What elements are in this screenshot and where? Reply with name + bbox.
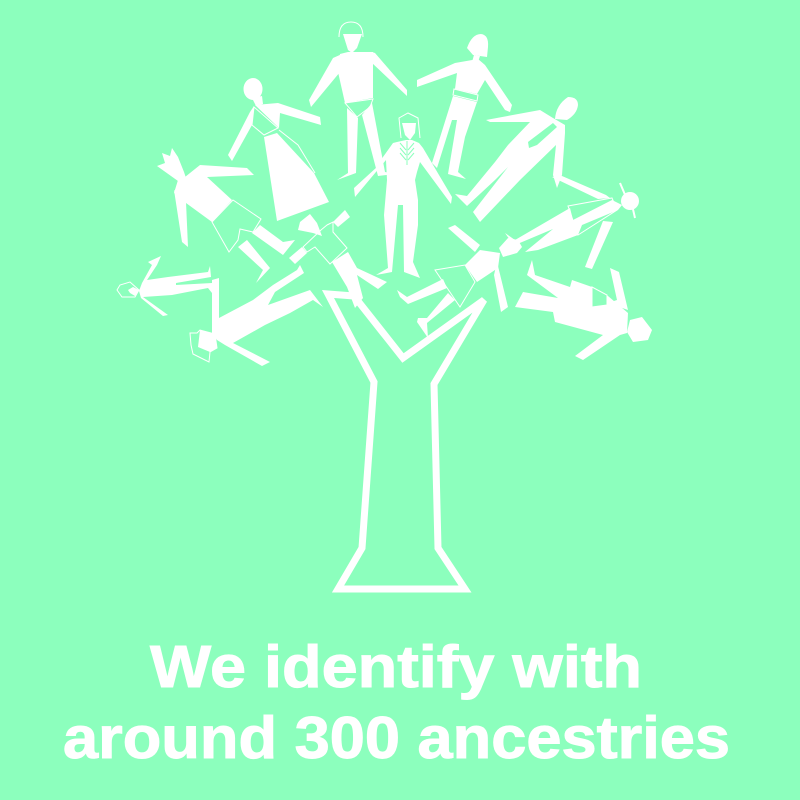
heading	[63, 634, 730, 771]
figure: man with tie, right	[455, 97, 578, 222]
figure: man with spiky hair and shorts, left	[157, 148, 295, 283]
figure: woman with braid, centre	[354, 113, 452, 278]
figure: woman in dress, upper left	[228, 78, 329, 221]
figure: small girl, centre	[289, 210, 387, 308]
figure: man with hat, lower left	[190, 265, 323, 366]
figure: man lying, lower right	[515, 260, 652, 360]
figure: small man, far left	[117, 256, 212, 316]
figure: woman with skirt, centre right	[397, 225, 522, 338]
heading: around 300 ancestries	[63, 705, 730, 771]
figure: man in trousers, top right	[417, 34, 512, 179]
figure: man in briefs, top centre	[309, 22, 407, 180]
figure: man with shorts, right	[505, 176, 639, 269]
heading: We identify with	[150, 634, 642, 700]
icon: tree trunk outline	[328, 294, 484, 589]
